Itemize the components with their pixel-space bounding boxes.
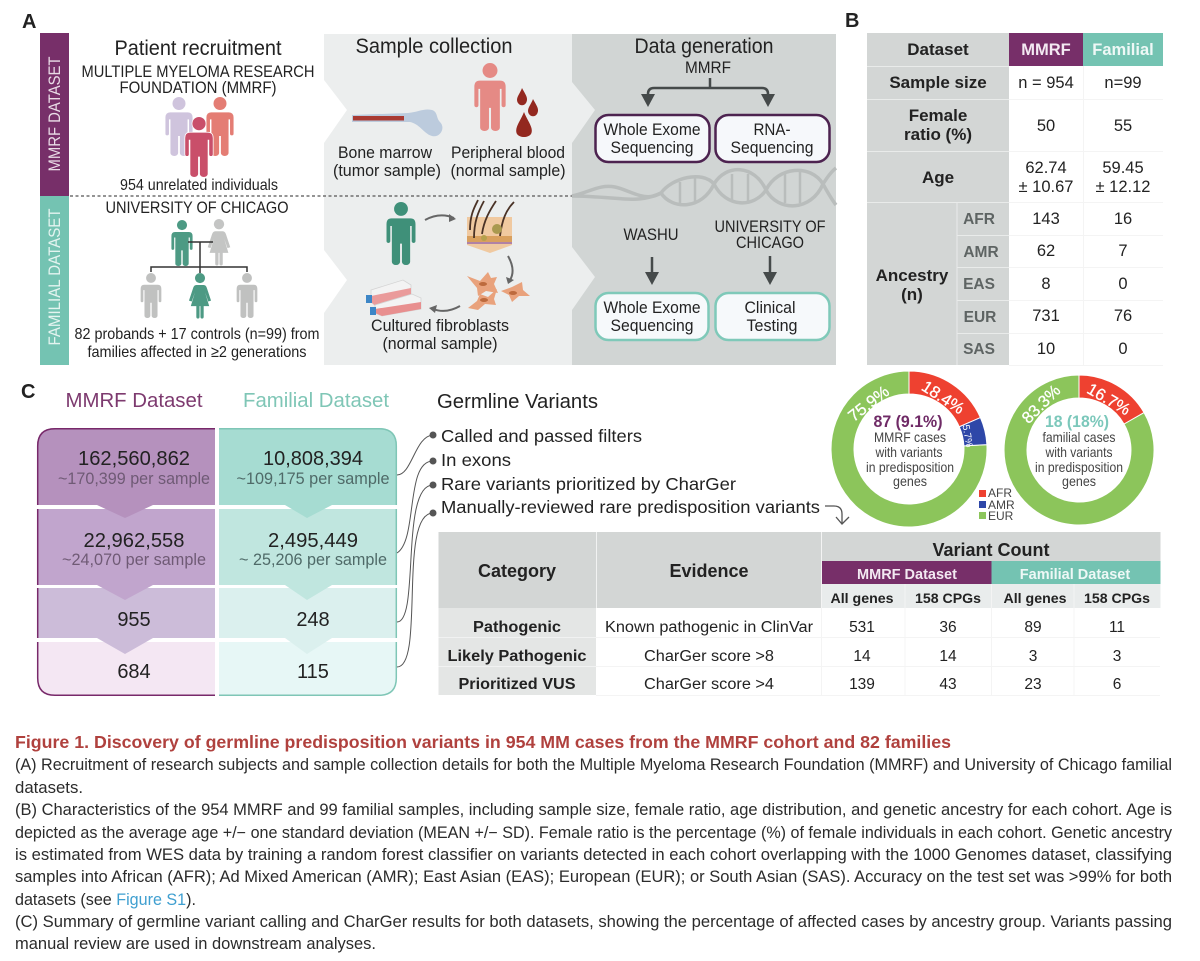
panel A: study design xyxy=(22,11,836,365)
table column headers: Familial xyxy=(1092,41,1154,59)
box: clinical testing xyxy=(716,293,830,340)
box: RNA sequencing xyxy=(716,115,830,162)
funnel values: familial: 10,808,394 xyxy=(263,448,363,470)
arrow: skin to fibroblasts xyxy=(506,256,514,284)
funnel values: familial: 2,495,449 xyxy=(268,530,358,552)
text: cultured fibroblasts: Cultured fibroblasts xyxy=(371,317,509,335)
donut chart: familial: genes xyxy=(1062,474,1096,489)
panel: sample collection background xyxy=(324,34,600,365)
text: University of Chicago sequencing site: CHICAGO xyxy=(736,234,804,252)
arrow: person to skin xyxy=(425,214,456,222)
box: whole exome sequencing, MMRF: Whole Exome xyxy=(604,121,700,139)
heading: patient recruitment: Patient recruitment xyxy=(114,37,282,60)
table rows: 3 xyxy=(1029,648,1037,665)
gene-set sub-headers: All genes xyxy=(830,590,894,606)
caption text B xyxy=(15,801,1173,909)
table row labels: Dataset xyxy=(907,40,969,59)
table rows: 89 xyxy=(1024,619,1042,636)
funnel: familial dataset xyxy=(219,428,397,696)
box: whole exome sequencing, MMRF: Sequencing xyxy=(610,139,694,157)
text: MMRF name xyxy=(82,63,314,97)
text: WashU: WASHU xyxy=(624,226,678,244)
gene-set sub-headers: 158 CPGs xyxy=(1084,590,1150,606)
panel letter A: A xyxy=(22,11,36,33)
text: peripheral blood: (normal sample) xyxy=(450,162,566,180)
donut chart: MMRF: in predisposition xyxy=(866,460,954,475)
funnel values: MMRF xyxy=(58,448,210,683)
text: University of Chicago: UNIVERSITY OF CHICAGO xyxy=(106,199,289,217)
heading: MMRF dataset: MMRF Dataset xyxy=(66,390,203,412)
table values: 731 xyxy=(1032,307,1060,325)
funnel values: familial: ~ 25,206 per sample xyxy=(239,550,387,569)
text: bone marrow xyxy=(333,144,441,180)
text: cultured fibroblasts xyxy=(371,317,509,353)
icon: fibroblasts xyxy=(467,272,530,310)
panel: data generation background xyxy=(572,34,836,365)
figure caption xyxy=(15,732,1173,953)
text: probands and controls: 82 probands + 17 controls (n=99) from xyxy=(74,326,320,343)
text: cultured fibroblasts: (normal sample) xyxy=(382,335,498,353)
table rows: 531 xyxy=(849,619,875,636)
table values: 62.74 xyxy=(1025,159,1067,177)
heading: data generation: Data generation xyxy=(634,35,774,58)
ancestry labels: EAS xyxy=(963,276,995,293)
table values: ± 12.12 xyxy=(1096,178,1150,196)
table values: 0 xyxy=(1118,275,1128,293)
table rows: Pathogenic xyxy=(473,619,561,636)
divider line xyxy=(70,195,572,197)
panel letter C: C xyxy=(21,381,35,403)
table values: 50 xyxy=(1037,117,1055,135)
arrow: WashU down xyxy=(645,257,659,285)
table row labels xyxy=(876,40,987,304)
heading: sample collection: Sample collection xyxy=(356,35,512,58)
text: probands and controls xyxy=(74,326,320,361)
icon: blood drops xyxy=(516,88,538,137)
dataset sub-headers: MMRF Dataset xyxy=(857,567,957,583)
table rows: 14 xyxy=(853,648,871,665)
funnel values: MMRF: 955 xyxy=(117,609,151,631)
caption text B: (B) Characteristics of the 954 MMRF and 99 familial samples, including sample size, female ratio, age distribution, and genetic ancestry for each cohort. Age is xyxy=(15,801,1172,819)
donut chart: familial xyxy=(1004,375,1154,525)
arrow: MMRF branching xyxy=(641,78,775,107)
text: bone marrow: Bone marrow xyxy=(338,144,432,162)
box: RNA sequencing: RNA- xyxy=(754,121,790,139)
funnel values: familial: 248 xyxy=(296,609,330,631)
caption text B: samples into African (AFR); Ad Mixed American (AMR); East Asian (EAS); European (EUR); or South Asian (SAS). Accuracy on the test set was >99% for both xyxy=(15,868,1172,886)
table rows: Known pathogenic in ClinVar xyxy=(605,619,813,636)
list: germline variant stages xyxy=(441,426,820,517)
caption text A xyxy=(15,756,1172,797)
table rows: CharGer score >4 xyxy=(644,676,774,693)
text: peripheral blood: Peripheral blood xyxy=(451,144,565,162)
table rows: 139 xyxy=(849,676,875,693)
icon: person, skin donor xyxy=(387,202,415,265)
table rows: Prioritized VUS xyxy=(458,676,576,693)
donut chart: MMRF: MMRF cases xyxy=(874,430,946,445)
heading: familial dataset: Familial Dataset xyxy=(243,390,389,412)
column: sample collection xyxy=(333,35,566,353)
caption text C: (C) Summary of germline variant calling and CharGer results for both datasets, showing the percentage of affected cases by ancestry group. Variants passing xyxy=(15,913,1172,931)
table rows: 6 xyxy=(1113,676,1121,693)
box: whole exome sequencing, familial: Sequencing xyxy=(610,317,694,335)
table rows: 23 xyxy=(1024,676,1042,693)
text: MMRF name: MULTIPLE MYELOMA RESEARCH xyxy=(82,63,314,81)
text: MMRF name: FOUNDATION (MMRF) xyxy=(120,79,276,97)
text: University of Chicago sequencing site xyxy=(714,218,826,252)
donut chart: MMRF: genes xyxy=(893,474,927,489)
table backgrounds xyxy=(438,532,1160,696)
table headers: Evidence xyxy=(669,561,749,581)
funnel values: MMRF: 162,560,862 xyxy=(78,448,190,470)
table row labels: Sample size xyxy=(889,73,987,92)
funnel values: MMRF: 22,962,558 xyxy=(84,530,184,552)
donut chart: familial: 83.3% xyxy=(1019,381,1065,427)
panel B: cohort characteristics table xyxy=(845,10,1163,366)
caption text C: manual review are used in downstream analyses. xyxy=(15,935,376,953)
icon: bone marrow xyxy=(352,109,442,136)
donut chart: familial: 18 (18%) xyxy=(1045,412,1109,431)
dataset sub-headers xyxy=(857,567,1130,583)
icon: three unrelated individuals xyxy=(165,97,234,177)
table values: 59.45 xyxy=(1102,159,1144,177)
list: germline variant stages: In exons xyxy=(441,450,511,470)
ancestry labels: AFR xyxy=(963,211,995,228)
list: germline variant stages: Rare variants prioritized by CharGer xyxy=(441,474,736,494)
ancestry labels: SAS xyxy=(963,341,995,358)
funnel values: MMRF: 684 xyxy=(117,661,151,683)
text: MMRF source: MMRF xyxy=(685,59,731,77)
panel C: germline variants xyxy=(21,371,1160,696)
caption title: Figure 1. Discovery of germline predisposition variants in 954 MM cases from the MMRF cohort and 82 families xyxy=(15,732,951,752)
table values: 0 xyxy=(1118,340,1128,358)
donut chart: familial: in predisposition xyxy=(1035,460,1123,475)
box: whole exome sequencing, familial xyxy=(596,293,708,340)
column: data generation xyxy=(596,35,830,340)
arrow: to variant table xyxy=(825,506,849,524)
funnel: MMRF dataset xyxy=(37,428,215,696)
ancestry labels xyxy=(963,211,999,358)
icon: person, peripheral blood xyxy=(474,63,506,131)
funnel values: familial: 115 xyxy=(297,661,329,683)
table backgrounds xyxy=(867,33,1163,366)
donut chart: MMRF: 5.7% xyxy=(960,424,974,448)
table headers: Category xyxy=(478,561,556,581)
table values: 7 xyxy=(1118,242,1128,260)
table values: 62 xyxy=(1037,242,1055,260)
table row labels: (n) xyxy=(901,285,923,304)
table values: n=99 xyxy=(1104,74,1142,92)
table values: n = 954 xyxy=(1018,74,1074,92)
caption text B: datasets (see Figure S1). xyxy=(15,891,196,909)
box: clinical testing: Clinical xyxy=(744,299,796,317)
table rows: 43 xyxy=(939,676,957,693)
table values: 76 xyxy=(1114,307,1132,325)
table row labels: ratio (%) xyxy=(904,125,972,144)
gene-set sub-headers xyxy=(830,590,1150,606)
icon: culture flasks xyxy=(366,280,421,316)
table values: 55 xyxy=(1114,117,1132,135)
donut chart: MMRF: 18.4% xyxy=(918,378,968,418)
table headers xyxy=(478,540,1050,581)
caption text B: depicted as the average age +/− one standard deviation (MEAN +/− SD). Female ratio is the percentage (%) of female individuals in each cohort. Genetic ancestry xyxy=(15,824,1173,842)
donut chart: familial: 16.7% xyxy=(1084,380,1134,419)
label bar: MMRF dataset xyxy=(40,33,69,196)
gene-set sub-headers: 158 CPGs xyxy=(915,590,981,606)
caption text A: datasets. xyxy=(15,779,83,797)
table values: 10 xyxy=(1037,340,1055,358)
table rows: 3 xyxy=(1113,648,1121,665)
funnel values: familial xyxy=(236,448,390,683)
caption text B: is estimated from WES data by training a random forest classifier on variants detected in each cohort overlapping with the 1000 Genomes dataset, classifying xyxy=(15,846,1172,864)
box: clinical testing: Testing xyxy=(746,317,798,335)
variant count table xyxy=(438,532,1160,696)
funnel values: MMRF: ~24,070 per sample xyxy=(62,550,206,569)
ancestry labels: EUR xyxy=(964,309,996,326)
box: whole exome sequencing, familial: Whole Exome xyxy=(604,299,700,317)
dataset sub-headers: Familial Dataset xyxy=(1020,567,1130,583)
caption text C xyxy=(15,913,1172,953)
table values: ± 10.67 xyxy=(1019,178,1073,196)
legend: ancestry xyxy=(979,486,1015,523)
panel letter B: B xyxy=(845,10,859,32)
table row labels: Age xyxy=(922,168,954,187)
arrow: University of Chicago down xyxy=(763,256,777,285)
donut chart: familial: familial cases xyxy=(1042,430,1116,445)
list: germline variant stages: Called and passed filters xyxy=(441,426,642,446)
table values: 16 xyxy=(1114,210,1132,228)
gene-set sub-headers: All genes xyxy=(1004,590,1067,606)
arrow: fibroblasts to flasks xyxy=(429,305,460,313)
table row labels: Ancestry xyxy=(876,266,949,285)
table rows: CharGer score >8 xyxy=(644,648,774,665)
table column headers: MMRF xyxy=(1021,41,1071,59)
text: University of Chicago sequencing site: UNIVERSITY OF xyxy=(714,218,826,236)
table column headers xyxy=(1021,41,1154,59)
table rows: 14 xyxy=(939,648,957,665)
connectors: funnel to variant stages xyxy=(397,432,436,667)
table row labels: Female xyxy=(909,106,967,125)
icon: family pedigree xyxy=(141,219,257,319)
table values: 143 xyxy=(1032,210,1060,228)
icon: DNA helix xyxy=(572,168,836,206)
caption text A: (A) Recruitment of research subjects and sample collection details for both the Multiple Myeloma Research Foundation (MMRF) and University of Chicago familial xyxy=(15,756,1172,774)
funnel values: familial: ~109,175 per sample xyxy=(236,469,390,488)
label bar: MMRF dataset: MMRF DATASET xyxy=(46,56,64,172)
donut chart: MMRF xyxy=(831,371,987,527)
table values xyxy=(1018,74,1150,358)
column: patient recruitment xyxy=(74,37,320,361)
heading: germline variants: Germline Variants xyxy=(437,391,598,413)
table rows: Likely Pathogenic xyxy=(448,648,587,665)
legend: ancestry: EUR xyxy=(988,509,1014,523)
text: peripheral blood xyxy=(450,144,566,180)
donut chart: familial: with variants xyxy=(1045,445,1113,460)
label bar: familial dataset: FAMILIAL DATASET xyxy=(46,208,64,346)
box: whole exome sequencing, MMRF xyxy=(596,115,710,162)
donut chart: MMRF: with variants xyxy=(875,445,943,460)
label bar: familial dataset xyxy=(40,196,69,365)
box: RNA sequencing: Sequencing xyxy=(730,139,814,157)
table rows: 11 xyxy=(1109,619,1125,636)
donut chart: MMRF: 87 (9.1%) xyxy=(874,412,942,431)
icon: skin section xyxy=(467,200,514,253)
text: bone marrow: (tumor sample) xyxy=(333,162,441,180)
ancestry labels: AMR xyxy=(963,244,999,261)
table rows: 36 xyxy=(939,619,957,636)
table values: 8 xyxy=(1041,275,1051,293)
text: probands and controls: families affected in ≥2 generations xyxy=(88,344,306,361)
table rows xyxy=(448,619,1125,693)
list: germline variant stages: Manually-reviewed rare predisposition variants xyxy=(441,497,820,517)
donut chart: MMRF: 75.9% xyxy=(845,382,893,426)
legend: ancestry: AFR xyxy=(988,486,1012,500)
text: 954 unrelated individuals: 954 unrelated individuals xyxy=(120,177,278,194)
funnel values: MMRF: ~170,399 per sample xyxy=(58,469,210,488)
table headers: Variant Count xyxy=(932,540,1050,560)
legend: ancestry: AMR xyxy=(988,498,1015,512)
